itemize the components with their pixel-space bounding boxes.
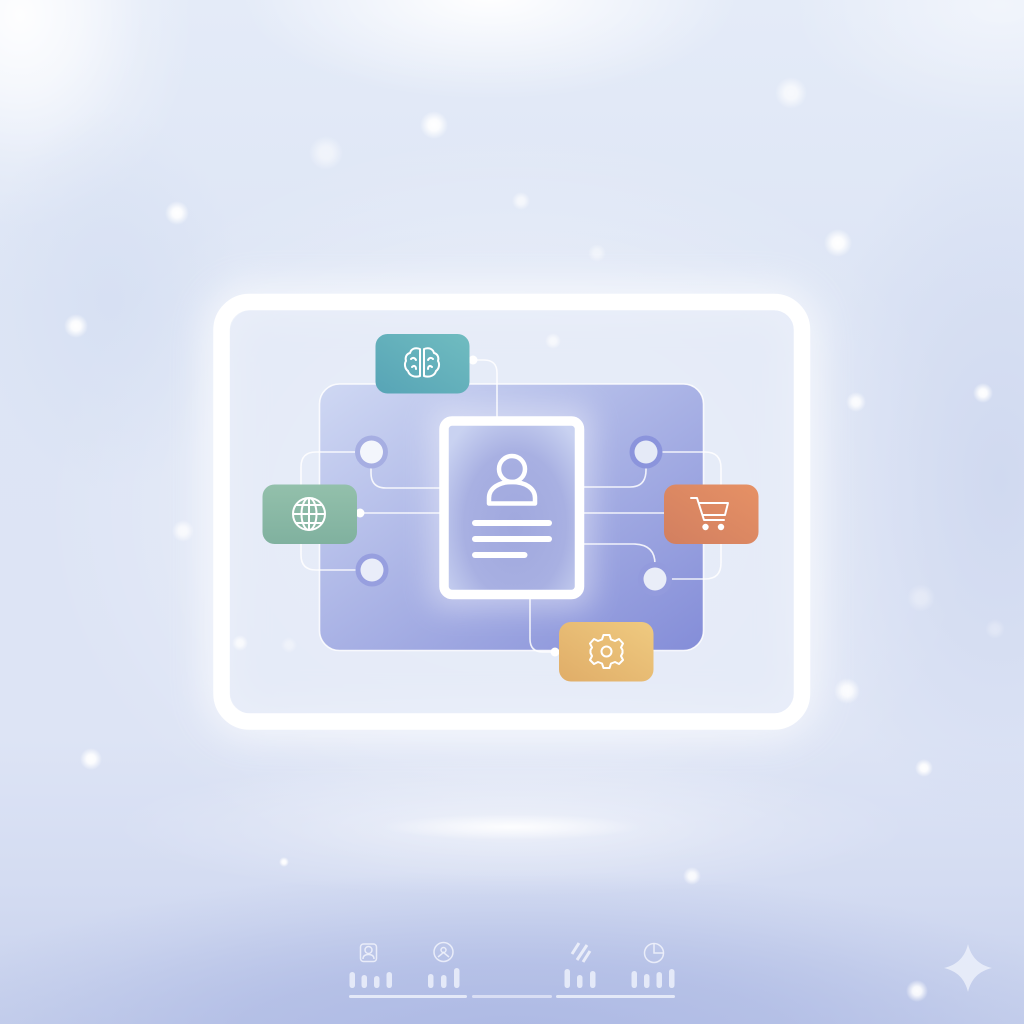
icon: four-point star (944, 944, 992, 992)
baselines (349, 995, 675, 998)
text lines (472, 520, 552, 558)
node: brain card (376, 334, 470, 394)
panel: outer glowing frame (221, 302, 802, 722)
node: gear card (559, 622, 654, 682)
panel: blue background card (320, 384, 704, 650)
connector lines (301, 360, 721, 652)
node: globe card (262, 484, 357, 544)
icon: profile badge (360, 944, 376, 962)
connector node: upper left (355, 436, 388, 468)
icon: gear (590, 635, 623, 668)
icon: globe (293, 498, 325, 530)
icon: pie chart (644, 944, 664, 962)
central document card (430, 406, 593, 609)
icon: brain (405, 348, 439, 377)
icon: shopping cart (691, 498, 728, 529)
connector dots (356, 356, 560, 656)
connector node: upper right (630, 436, 662, 468)
icon: user circle (434, 942, 453, 962)
mini bar charts (350, 968, 674, 988)
connector node: lower left (356, 554, 388, 586)
icon: striped tag (572, 943, 590, 962)
icon: user avatar (489, 456, 535, 504)
connector node: lower right (638, 562, 672, 596)
bottom icon strip (349, 942, 675, 998)
node: cart card (664, 484, 758, 544)
